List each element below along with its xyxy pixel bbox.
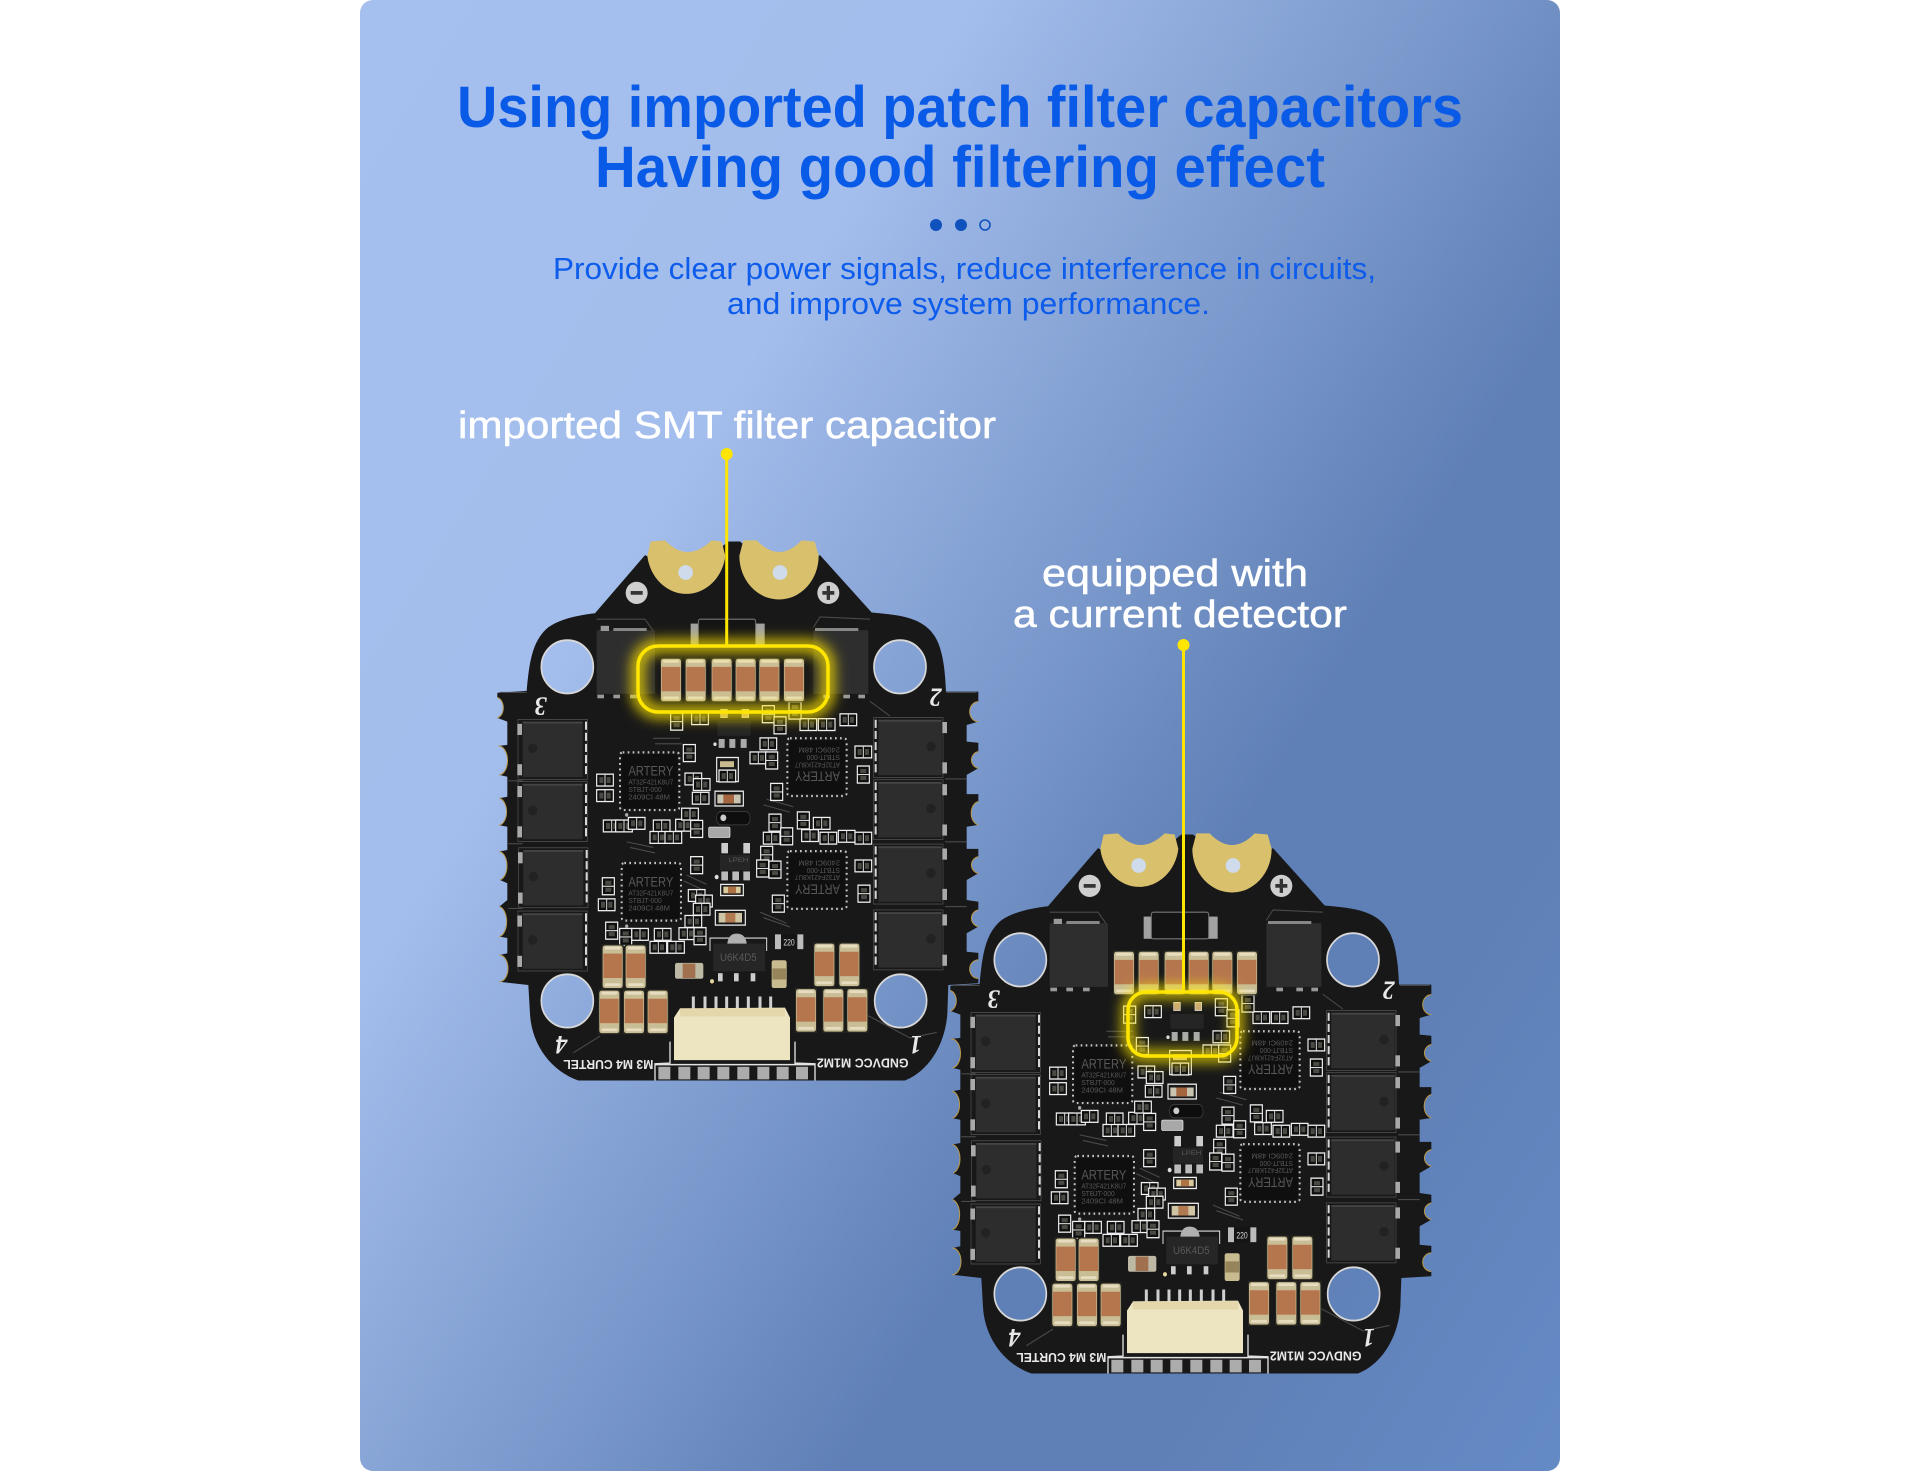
board 1 small components	[597, 702, 872, 984]
board 1 silkscreen text: 2409CI 48M	[628, 905, 670, 912]
label: equipped with a current detector: equipped with	[1042, 553, 1308, 595]
board 1 silkscreen text: ARTERY	[795, 881, 840, 897]
board 1 silkscreen text: 220	[783, 937, 795, 948]
board 2 silkscreen text: ARTERY	[1081, 1056, 1126, 1071]
board 1 silkscreen text: STBJT-000	[628, 898, 662, 905]
board 2 silkscreen text: ARTERY	[1081, 1167, 1126, 1182]
board 1 silkscreen text: 1	[910, 1030, 922, 1059]
title: Using imported patch filter capacitors	[457, 75, 1463, 140]
board 2 silkscreen text	[988, 975, 1396, 1365]
board 2 connector	[1108, 1290, 1268, 1373]
board 1 silkscreen text: ARTERY	[628, 763, 673, 778]
board 1 connector	[655, 997, 815, 1080]
subtitle: and improve system performance.	[727, 286, 1210, 321]
board 1 silkscreen text: GNDVCC M1M2	[817, 1056, 908, 1070]
board 2 silkscreen text: 1	[1363, 1323, 1375, 1352]
board 2 silkscreen text: M3 M4 CURTEL	[1016, 1350, 1106, 1365]
board 1 silkscreen text: STBJT-000	[807, 866, 840, 873]
board 2 small components	[1050, 995, 1325, 1277]
pagination dots	[930, 219, 990, 231]
board 2 silkscreen text: STBJT-000	[1260, 1159, 1293, 1166]
board 2 silkscreen text: STBJT-000	[1081, 1191, 1115, 1198]
board 2 gold power tabs	[1079, 833, 1292, 897]
board 1 capacitors	[598, 658, 868, 1034]
board 1 silkscreen text: U6K4D5	[720, 952, 757, 964]
board 2 silkscreen text: AT32F421K8U7	[1081, 1183, 1126, 1191]
board 1 silkscreen text: LPEH	[728, 857, 749, 864]
board 2 silkscreen text: ARTERY	[1248, 1174, 1293, 1190]
board 1 silkscreen text: ARTERY	[795, 768, 840, 784]
board 1 silkscreen text: STBJT-000	[628, 787, 662, 794]
board 1 silkscreen text: ARTERY	[628, 874, 673, 889]
board 2 silkscreen text: STBJT-000	[1081, 1080, 1115, 1087]
callout: current detector highlight box	[1128, 992, 1237, 1056]
board 2 motor MOSFETs	[970, 1011, 1400, 1264]
board 1 silkscreen text: 2409CI 48M	[798, 858, 840, 866]
leader line: current detector callout	[1178, 639, 1190, 992]
board 2 silkscreen text: AT32F421K8U7	[1248, 1053, 1293, 1061]
label: equipped with a current detector	[1013, 553, 1347, 636]
board 2: lower-right ESC PCB	[950, 833, 1431, 1373]
subtitle: Provide clear power signals, reduce interference in circuits,	[553, 251, 1376, 286]
board 2 silkscreen text: 2409CI 48M	[1251, 1038, 1293, 1046]
board 2 outline and mounting holes	[950, 834, 1431, 1373]
board 2 silkscreen text: GNDVCC M1M2	[1270, 1349, 1361, 1363]
board 1 silkscreen text: 2	[929, 682, 943, 711]
board 2 silkscreen text: AT32F421K8U7	[1248, 1166, 1293, 1173]
board 2 silkscreen text: 2409CI 48M	[1081, 1087, 1123, 1095]
callout: capacitor highlight box	[638, 646, 828, 712]
board 1 silkscreen text: AT32F421K8U7	[628, 779, 673, 787]
board 1 silkscreen text: STBJT-000	[807, 753, 840, 760]
board 2 capacitors	[1051, 951, 1321, 1327]
board 2 silkscreen text: ARTERY	[1248, 1061, 1293, 1077]
board 1 outline and mounting holes	[497, 541, 978, 1080]
title	[457, 75, 1463, 200]
board 1 silkscreen text: AT32F421K8U7	[795, 873, 840, 880]
board 1: lower-left ESC PCB	[497, 540, 978, 1080]
label: equipped with a current detector: a current detector	[1013, 594, 1347, 636]
panel: gradient background	[360, 0, 1560, 1471]
board 2 silkscreen text: LPEH	[1181, 1150, 1202, 1157]
subtitle	[553, 251, 1376, 321]
label: imported SMT filter capacitor: imported SMT filter capacitor	[458, 405, 996, 447]
board 1 silkscreen text: 2409CI 48M	[798, 745, 840, 753]
board 2 silkscreen text: 2409CI 48M	[1251, 1151, 1293, 1159]
board 2 silkscreen text: AT32F421K8U7	[1081, 1072, 1126, 1080]
board 1 silkscreen text: 2409CI 48M	[628, 794, 670, 802]
board 1 silkscreen text: 4	[555, 1030, 568, 1059]
board 2 silkscreen text: 2409CI 48M	[1081, 1198, 1123, 1205]
board 1 silkscreen text: 3	[535, 691, 548, 721]
board 1 gold power tabs	[626, 540, 839, 604]
board 2 silkscreen text: U6K4D5	[1173, 1245, 1210, 1257]
board 1 top MOSFETs and diode	[597, 619, 868, 698]
board 2 MCU chips	[1073, 1031, 1300, 1214]
board 2 silkscreen text: 3	[988, 984, 1001, 1014]
board 1 silkscreen text: AT32F421K8U7	[795, 760, 840, 768]
board 1 silkscreen text: AT32F421K8U7	[628, 890, 673, 898]
board 2 silkscreen text: STBJT-000	[1260, 1046, 1293, 1053]
board 2 silkscreen text: 220	[1236, 1230, 1248, 1241]
board 2 silkscreen text: 2	[1382, 975, 1396, 1004]
board 1 MCU chips	[620, 738, 847, 921]
title: Having good filtering effect	[595, 135, 1325, 200]
board 1 silkscreen text	[535, 682, 943, 1072]
leader line: capacitor callout	[721, 448, 733, 646]
board 1 silkscreen text: M3 M4 CURTEL	[563, 1057, 653, 1072]
board 1 motor MOSFETs	[517, 718, 947, 971]
board 2 top MOSFETs and diode	[1050, 912, 1321, 991]
board 2 silkscreen text: 4	[1008, 1323, 1021, 1352]
